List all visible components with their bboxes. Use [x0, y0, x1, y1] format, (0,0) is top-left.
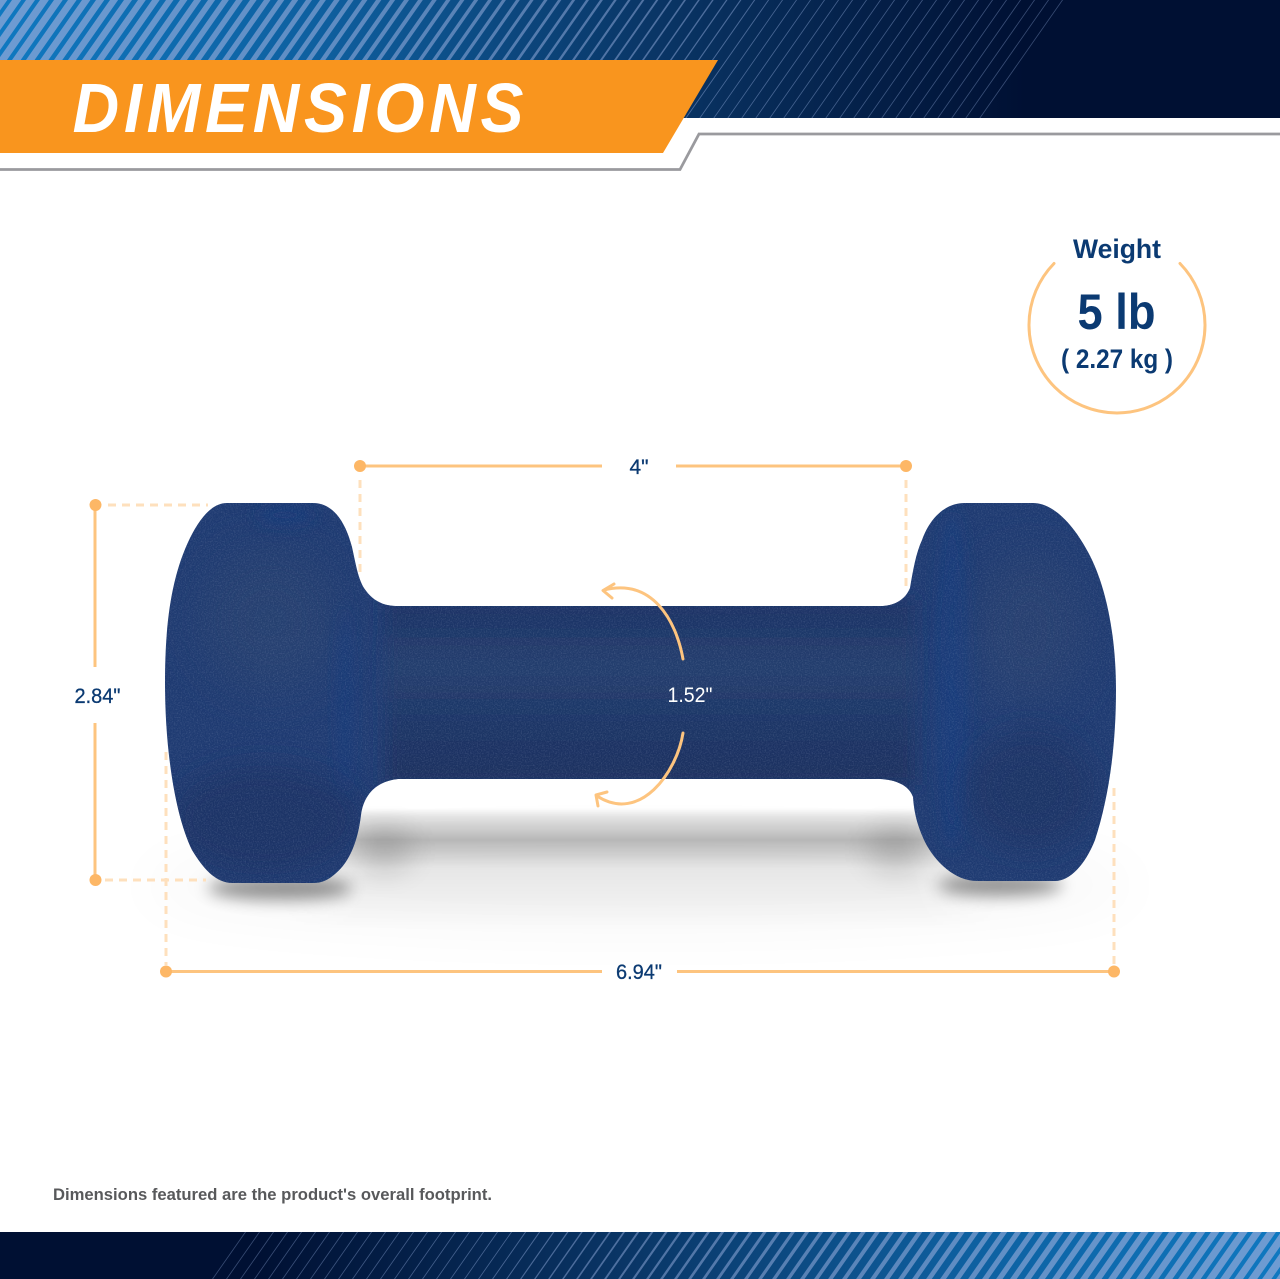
title: DIMENSIONS: [73, 70, 524, 148]
label 4 inches: 4": [630, 456, 648, 479]
weight in kilograms: ( 2.27 kg ): [1061, 344, 1173, 374]
title banner: [0, 60, 718, 153]
shading on heads and necks: [170, 505, 1095, 875]
weight heading: Weight: [1073, 234, 1161, 264]
base body: [160, 498, 1120, 888]
badge ring: [1029, 264, 1205, 413]
dimension: head height 2.84 inches: [74, 499, 208, 886]
dumbbell: [160, 498, 1120, 888]
label 6.94 inches: 6.94": [616, 961, 662, 984]
dimension: grip diameter 1.52 inches: [596, 584, 712, 806]
dimension: grip length 4 inches: [354, 456, 912, 588]
label 2.84 inches: 2.84": [74, 685, 120, 708]
dumbbell floor shadow: [140, 808, 1140, 930]
footnote: Dimensions featured are the product's overall footprint.: [53, 1185, 492, 1204]
lower arrow: [596, 733, 683, 806]
header band: [0, 0, 1280, 118]
label 1.52 inches: 1.52": [668, 684, 712, 707]
weight badge: [1029, 234, 1205, 413]
header outline stroke: [0, 134, 1280, 170]
handle: [385, 600, 915, 785]
dimension: overall length 6.94 inches: [160, 752, 1120, 984]
upper arrow: [603, 584, 683, 659]
surface texture: [160, 498, 1120, 888]
weight in pounds: 5 lb: [1078, 284, 1156, 340]
footer band: [0, 1232, 1280, 1279]
